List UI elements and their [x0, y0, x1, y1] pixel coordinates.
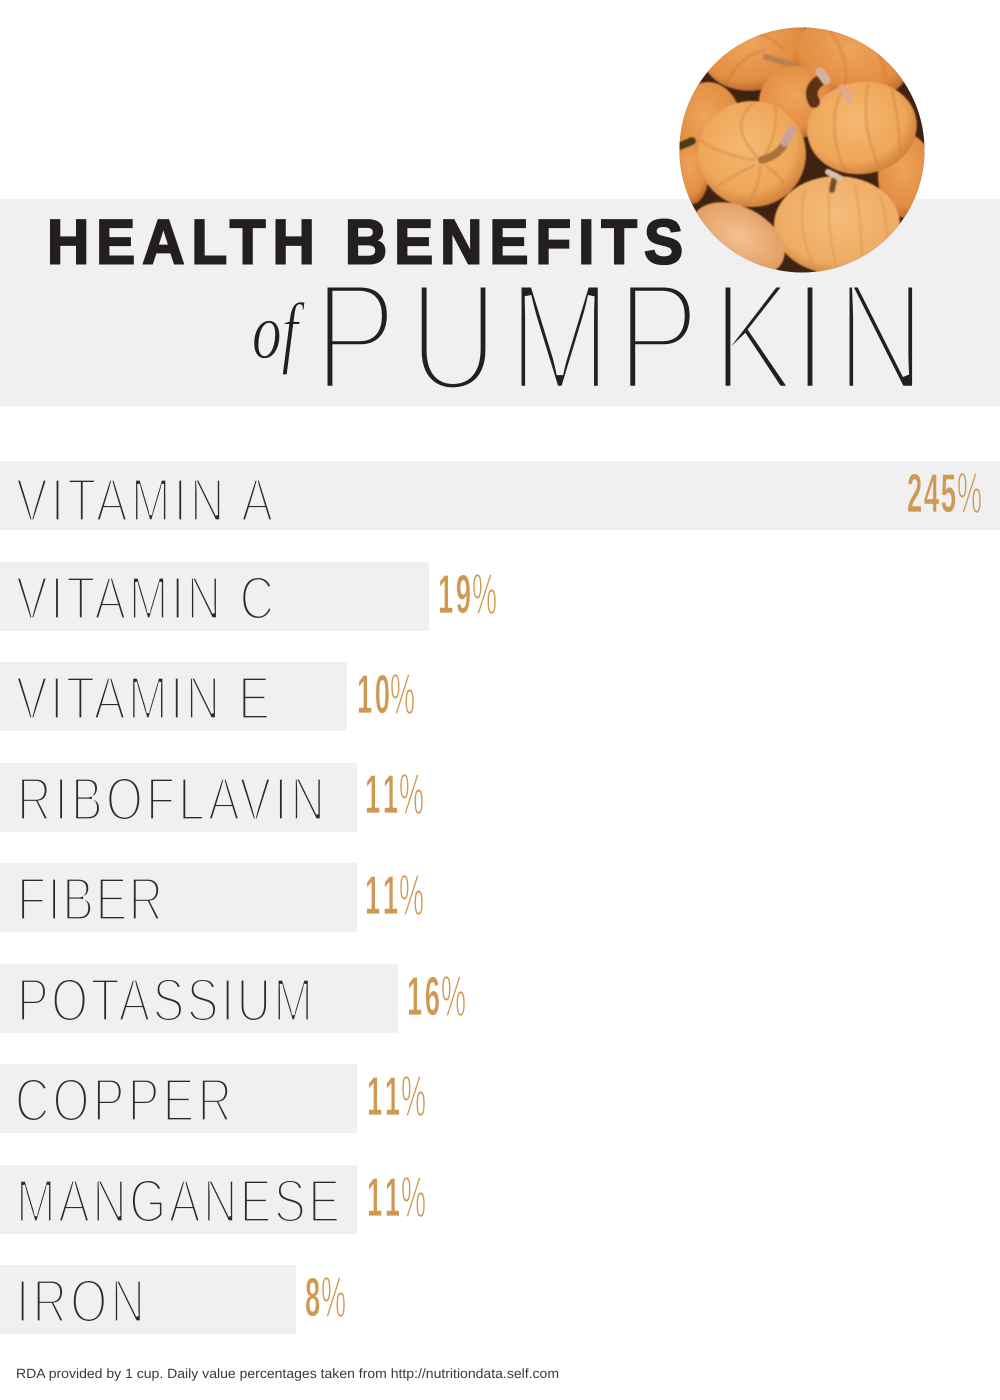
infographic: %: [321, 1265, 346, 1330]
pumpkin bottom left: [696, 201, 786, 270]
bar: fiber: [0, 863, 424, 933]
bar: copper: [0, 1064, 426, 1134]
bar: vitamin c: 19: [438, 563, 471, 625]
heading: pumpkin: PUMPKIN: [314, 250, 926, 423]
bar: riboflavin: RIBOFLAVIN: [17, 765, 325, 833]
bar: vitamin e: VITAMIN E: [16, 664, 270, 732]
bar: vitamin a: 245: [907, 462, 956, 524]
bar: iron: [0, 1265, 346, 1335]
infographic: %: [401, 1165, 426, 1230]
pumpkin bottom: [774, 176, 900, 274]
pumpkin top right: [798, 28, 904, 91]
bar: vitamin c: [0, 562, 497, 632]
infographic: %: [399, 863, 424, 928]
heading: health benefits: HEALTH BENEFITS: [47, 208, 683, 278]
infographic: %: [441, 964, 466, 1029]
bar: vitamin a: VITAMIN A: [16, 466, 273, 534]
bar: copper: COPPER: [15, 1066, 232, 1134]
pumpkin middle back: [759, 66, 835, 138]
bar: vitamin e: 10: [357, 663, 390, 725]
infographic: %: [390, 662, 415, 727]
bar: fiber: FIBER: [17, 865, 163, 933]
bar: iron: 8: [305, 1266, 320, 1328]
pumpkin top left: [707, 28, 806, 92]
bar: manganese: MANGANESE: [16, 1167, 340, 1235]
title band: [0, 199, 1000, 406]
footnote: RDA provided by 1 cup. Daily value percentages taken from http://nutritiondata.self.com: [16, 1366, 559, 1381]
pumpkin far left: [680, 81, 738, 205]
bar: vitamin c: VITAMIN C: [16, 564, 274, 632]
stems: [680, 57, 850, 190]
pumpkin main left: [698, 101, 806, 207]
bar: potassium: POTASSIUM: [17, 966, 313, 1034]
bar: riboflavin: [0, 762, 424, 833]
script word: of: of: [252, 288, 305, 376]
pumpkin photo: [680, 28, 924, 272]
infographic: %: [472, 562, 497, 627]
bar: manganese: 11: [367, 1166, 400, 1228]
bar: riboflavin: 11: [365, 763, 398, 825]
bar: copper: 11: [367, 1065, 400, 1127]
bar: potassium: 16: [407, 965, 440, 1027]
pumpkin right edge: [877, 136, 924, 219]
infographic: %: [401, 1064, 426, 1129]
bar: vitamin a: [0, 461, 1000, 534]
bar: fiber: 11: [365, 864, 398, 926]
pumpkin right: [806, 82, 918, 176]
bar: potassium: [0, 964, 466, 1034]
bar: vitamin e: [0, 662, 415, 732]
bar: iron: IRON: [16, 1267, 145, 1335]
infographic: %: [399, 762, 424, 827]
